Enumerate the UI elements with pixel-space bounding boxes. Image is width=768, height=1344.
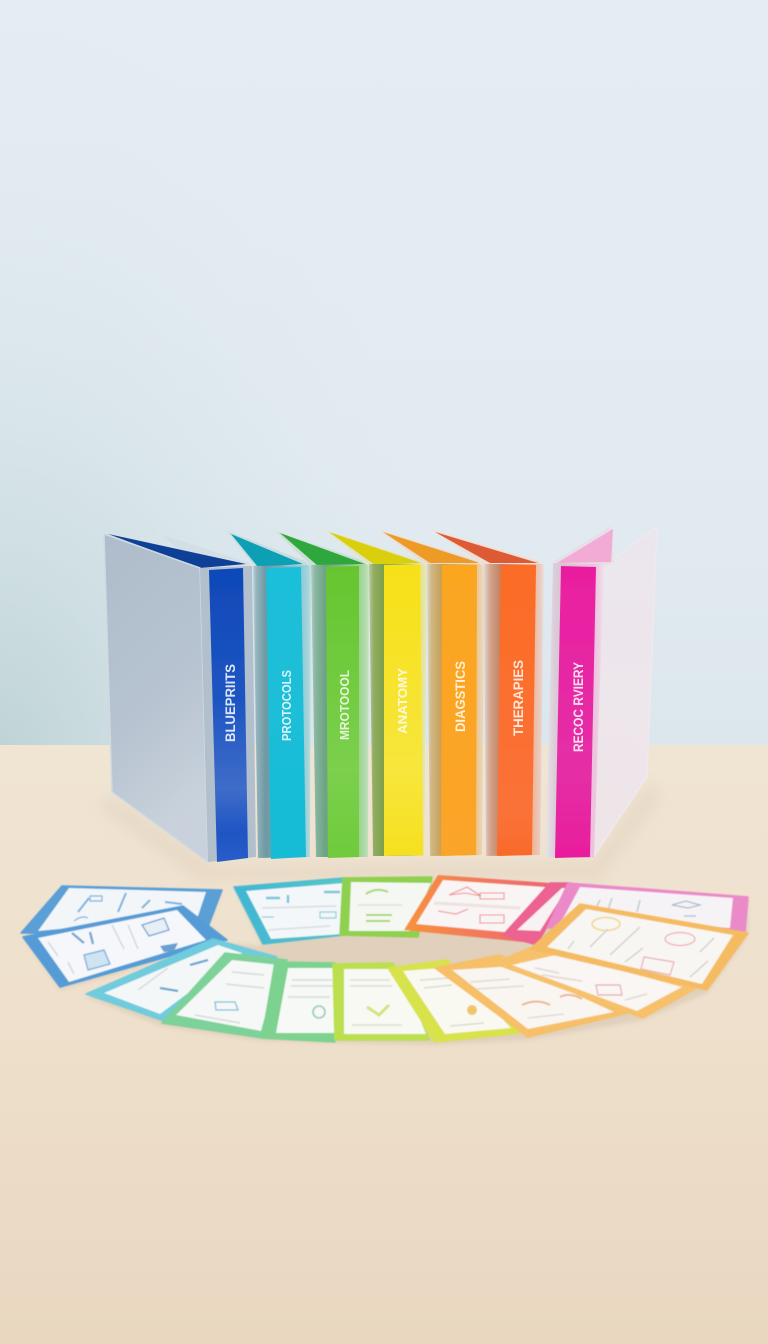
red binder body	[484, 564, 544, 856]
card: lime	[333, 963, 430, 1040]
binder: therapies	[431, 529, 545, 856]
green spine title: MROTOOOL	[337, 670, 352, 740]
red spine label	[497, 565, 536, 856]
binder contact shadow	[100, 780, 660, 880]
card: yellow green	[388, 960, 520, 1042]
binder: recovery	[546, 526, 657, 859]
blue binder inner triangle	[108, 534, 246, 568]
green binder body	[311, 564, 369, 857]
orange binder body	[427, 564, 485, 856]
binder: diagnostics	[379, 530, 486, 856]
orange binder flap	[379, 530, 486, 566]
teal spine label	[266, 567, 306, 859]
card: amber rear	[493, 948, 695, 1018]
teal spine title: PROTOCOLS	[279, 670, 294, 741]
card: teal green	[162, 953, 287, 1038]
pink binder side cover	[592, 527, 657, 859]
wall side shading	[0, 0, 768, 746]
yellow spine title: ANATOMY	[395, 668, 410, 734]
green binder flap	[275, 531, 370, 567]
orange spine label	[441, 565, 477, 856]
yellow spine label	[384, 565, 423, 856]
card shadows	[24, 880, 748, 1045]
fanned cards: top row middle	[234, 875, 748, 945]
blue binder side cover	[104, 534, 208, 862]
card: amber front	[530, 904, 748, 990]
binder: third green	[275, 531, 370, 858]
pink spine title: RECOC RVIERY	[571, 662, 586, 752]
fanned cards: top row left	[21, 886, 227, 987]
teal binder inner triangle	[231, 534, 303, 567]
pink binder inner triangle	[557, 529, 613, 563]
binder: anatomy	[325, 530, 428, 856]
binder: blueprints	[104, 533, 256, 862]
binder: protocols	[227, 531, 311, 859]
orange spine title: DIAGSTICS	[452, 661, 468, 732]
wall background	[0, 0, 768, 746]
card: blue front	[23, 906, 227, 987]
wooden desk	[0, 745, 768, 1344]
card: amber	[435, 955, 628, 1037]
card: teal top	[234, 878, 345, 944]
orange binder inner triangle	[383, 532, 480, 563]
card: orange red	[404, 875, 550, 943]
pink spine label	[555, 566, 596, 858]
teal binder body	[253, 565, 311, 858]
card: pink right	[547, 883, 748, 932]
card: green top	[340, 877, 432, 937]
blue spine title: BLUEPRIITS	[223, 664, 238, 742]
fanned cards: front arc	[86, 904, 748, 1042]
yellow binder inner triangle	[329, 532, 421, 565]
yellow binder flap	[325, 530, 428, 566]
red binder flap	[431, 529, 545, 566]
card: green	[262, 962, 337, 1042]
red spine title: THERAPIES	[510, 660, 526, 736]
red binder inner triangle	[435, 532, 538, 563]
green spine label	[326, 566, 359, 858]
teal binder flap	[227, 531, 311, 568]
card: light teal	[86, 939, 277, 1022]
blue binder spine sleeve	[200, 566, 256, 862]
green binder inner triangle	[280, 533, 365, 566]
blue spine label	[209, 568, 248, 862]
blue binder rear flap	[158, 533, 254, 568]
card: blue rear	[21, 886, 222, 935]
card: pink red	[503, 883, 570, 945]
yellow binder body	[369, 564, 427, 856]
pink binder rim	[553, 526, 614, 566]
pink binder body	[546, 563, 604, 858]
